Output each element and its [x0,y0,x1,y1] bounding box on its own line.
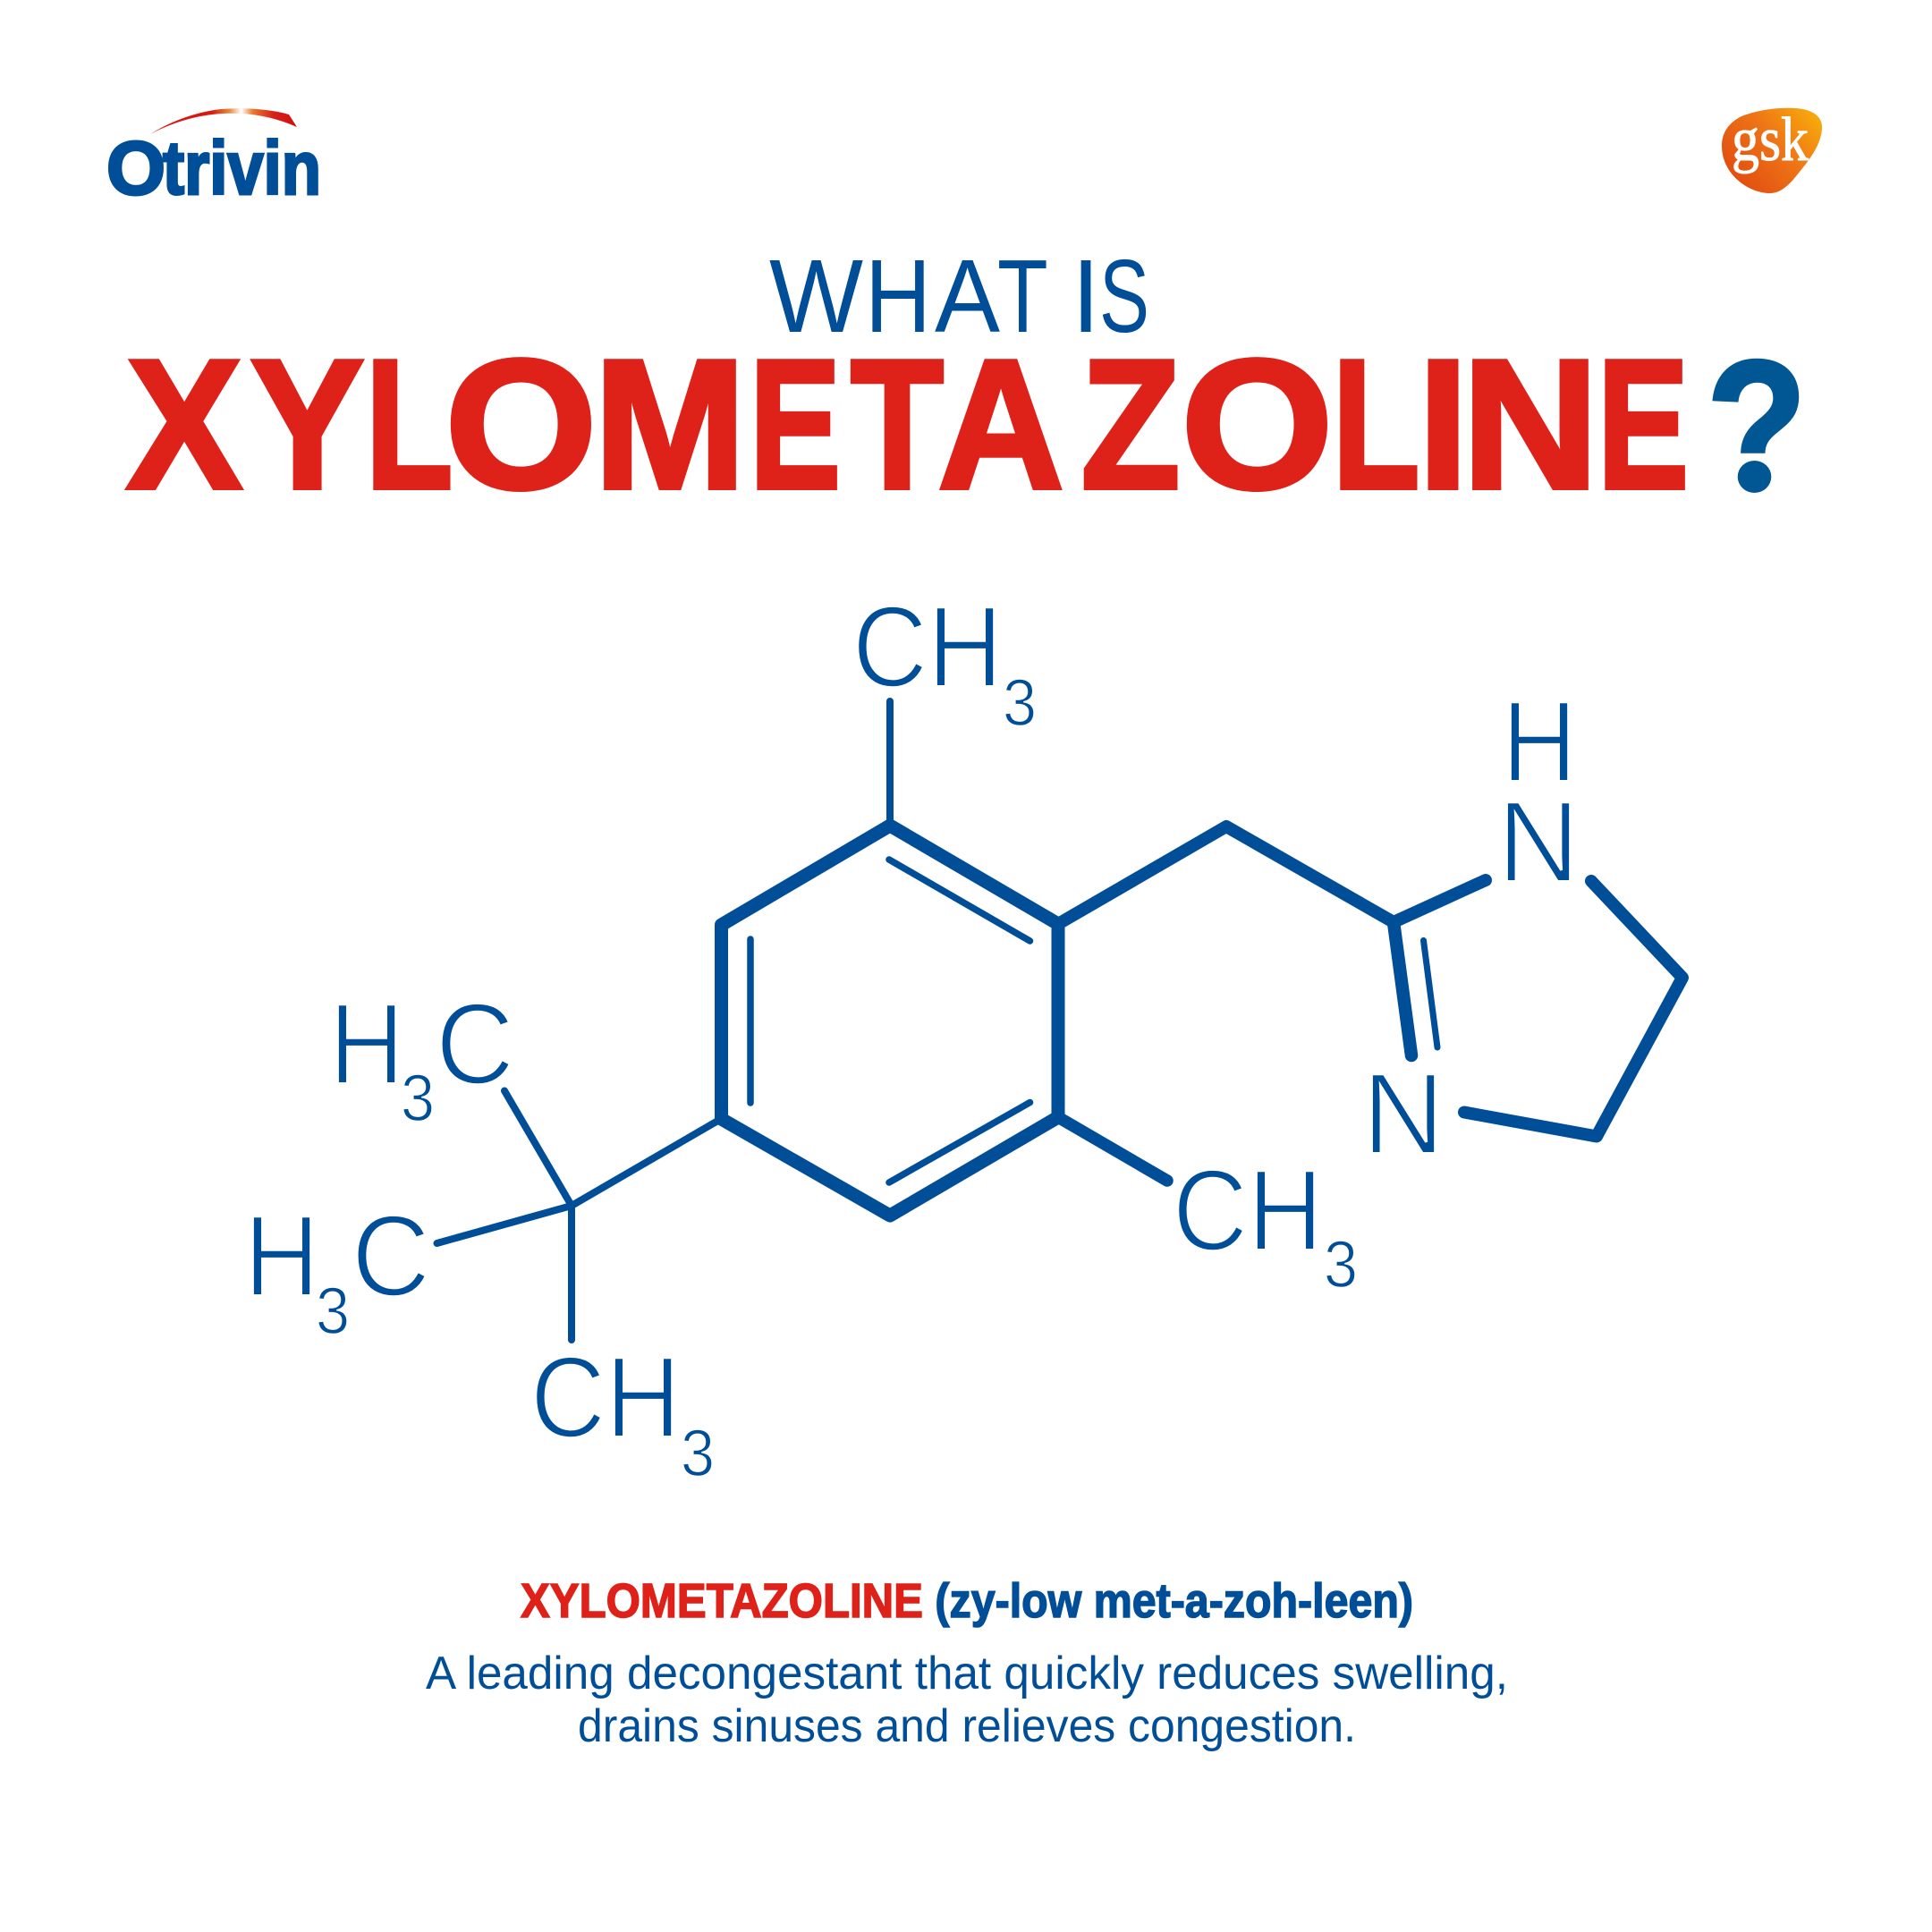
label: bottom CH3: CH [530,1333,681,1462]
heading: what is: W [769,238,863,354]
logo wordmark: trivin [163,126,321,210]
heading: xylometazoline: Z [1080,322,1181,528]
imidazoline ring [1394,880,1682,1136]
heading: xylometazoline: A [937,322,1064,528]
description: pronunciation: (zy-low met-a-zoh-leen) [923,1574,1413,1628]
logo: GSK [1722,106,1822,193]
chart: xylometazoline molecular structure [244,583,1682,1490]
heading: xylometazoline: L [365,322,453,528]
heading: what is: S [1099,238,1149,354]
double bond to N [1394,922,1411,1055]
description: pronunciation: XYLOMETAZOLINE [521,1574,923,1628]
bridge bonds [1058,826,1394,924]
label: right CH3: CH [1173,1147,1323,1275]
heading: xylometazoline: O [1181,322,1333,528]
heading: xylometazoline: Y [250,322,364,528]
ring outline [721,826,1058,1216]
heading: what is: H [865,238,931,354]
label: right CH3: 3 [1324,1227,1358,1301]
ring back bonds [1464,881,1682,1136]
heading: xylometazoline: N [1462,322,1599,528]
logo wordmark: O [106,126,165,210]
label: lower H3C: C [352,1191,430,1320]
heading: xylometazoline: T [851,322,944,528]
logo blob [1722,108,1822,193]
body line 2: drains sinuses and relieves congestion. [578,1700,1356,1752]
inner double bond [1424,941,1437,1047]
label: bottom CH3: 3 [681,1416,715,1490]
heading: xylometazoline: E [750,322,841,528]
bond to NH [1394,880,1486,922]
heading: what is: A [935,238,1001,354]
question mark glyph: ? [1707,323,1807,530]
label: top CH3: 3 [1003,665,1037,740]
dot mask [1732,454,1776,497]
label: lower H3C: H [244,1191,319,1320]
methyl bonds [886,701,894,826]
heading: xylometazoline: O [445,322,597,528]
label: upper N atom: N [1497,778,1580,907]
right methyl bond [1058,1117,1167,1181]
logo: Otrivin [106,108,321,210]
benzene ring [721,826,1058,1216]
tert-butyl bonds [436,1091,721,1340]
label: lower N atom: N [1362,1050,1445,1179]
heading: xylometazoline: L [1333,322,1420,528]
heading: xylometazoline: I [1419,322,1469,528]
heading: xylometazoline: M [594,322,746,528]
heading: xylometazoline: X [127,322,242,528]
body line 1: A leading decongestant that quickly reduces swelling, [426,1648,1508,1699]
heading: what is: I [1072,238,1100,354]
label: H atom: H [1502,678,1577,807]
label: upper H3C: 3 [401,1061,435,1135]
inner double bonds [750,860,1030,1182]
heading: question mark [1707,323,1807,530]
heading: what is: T [997,238,1046,354]
heading: xylometazoline: E [1597,322,1689,528]
round dot [1738,461,1771,493]
logo text: gsk [1732,106,1809,174]
label: upper H3C: H [329,980,404,1109]
description: body text [426,1648,1508,1752]
label: upper H3C: C [436,980,514,1109]
logo swoosh [150,108,297,134]
label: top CH3: CH [852,583,1003,712]
label: lower H3C: 3 [316,1274,350,1348]
